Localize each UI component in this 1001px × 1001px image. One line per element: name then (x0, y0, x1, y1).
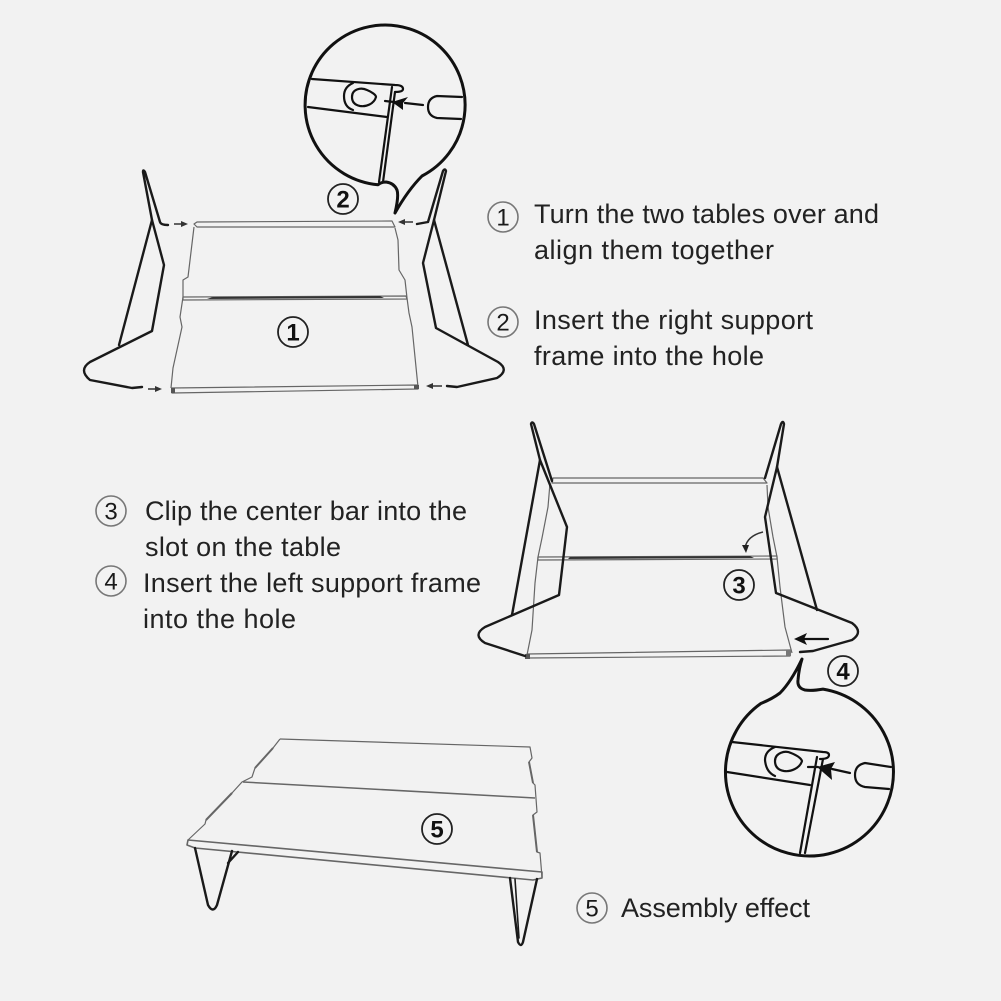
table: two tables aligned (171, 221, 419, 393)
badge 3: 3 (732, 572, 746, 600)
step 4 instruction: Insert the left support frame (143, 568, 481, 598)
badge 4 (828, 656, 858, 686)
table: clipped center bar (525, 478, 792, 659)
left support frame (84, 170, 168, 388)
callout: detail of right frame insertion (305, 25, 465, 213)
step 2 instruction: 2 (496, 310, 510, 336)
right support frame (765, 422, 858, 652)
badge 3 (724, 570, 754, 600)
right support frame (417, 170, 504, 387)
step 4 instruction: 4 (104, 568, 118, 596)
step 3 instruction (96, 496, 467, 562)
badge 1 (278, 317, 308, 347)
badge 2: 2 (336, 186, 350, 214)
folding legs (195, 848, 537, 945)
left support frame (478, 422, 567, 656)
step 1 instruction: align them together (534, 235, 774, 265)
callout: detail of left frame insertion (725, 659, 893, 856)
diagram: assembled table (187, 739, 542, 945)
badge 5 (422, 814, 452, 844)
step 4 instruction (96, 566, 481, 634)
arrow: clip center bar (742, 532, 763, 553)
badge 5: 5 (430, 816, 444, 844)
step 3 instruction: Clip the center bar into the (145, 496, 467, 526)
step 3 instruction: 3 (104, 498, 118, 526)
diagram: step 1 and 2 table with side frames (84, 25, 504, 393)
dashed insertion arrows (148, 219, 442, 392)
table top (187, 739, 542, 880)
badge 4: 4 (836, 658, 850, 686)
step 5 instruction: Assembly effect (621, 893, 810, 923)
step 2 instruction: Insert the right support (534, 305, 813, 335)
step 1 instruction: 1 (496, 204, 510, 232)
diagram: step 3 and 4 table with side frames (478, 422, 893, 856)
step 4 instruction: into the hole (143, 604, 296, 634)
step 1 instruction (488, 199, 879, 265)
arrow: insert frame (794, 633, 828, 645)
step 5 instruction: 5 (585, 896, 599, 922)
step 2 instruction (488, 305, 813, 371)
step 1 instruction: Turn the two tables over and (534, 199, 879, 229)
badge 1: 1 (286, 320, 300, 346)
step 3 instruction: slot on the table (145, 532, 341, 562)
step 2 instruction: frame into the hole (534, 341, 764, 371)
badge 2 (328, 184, 358, 214)
